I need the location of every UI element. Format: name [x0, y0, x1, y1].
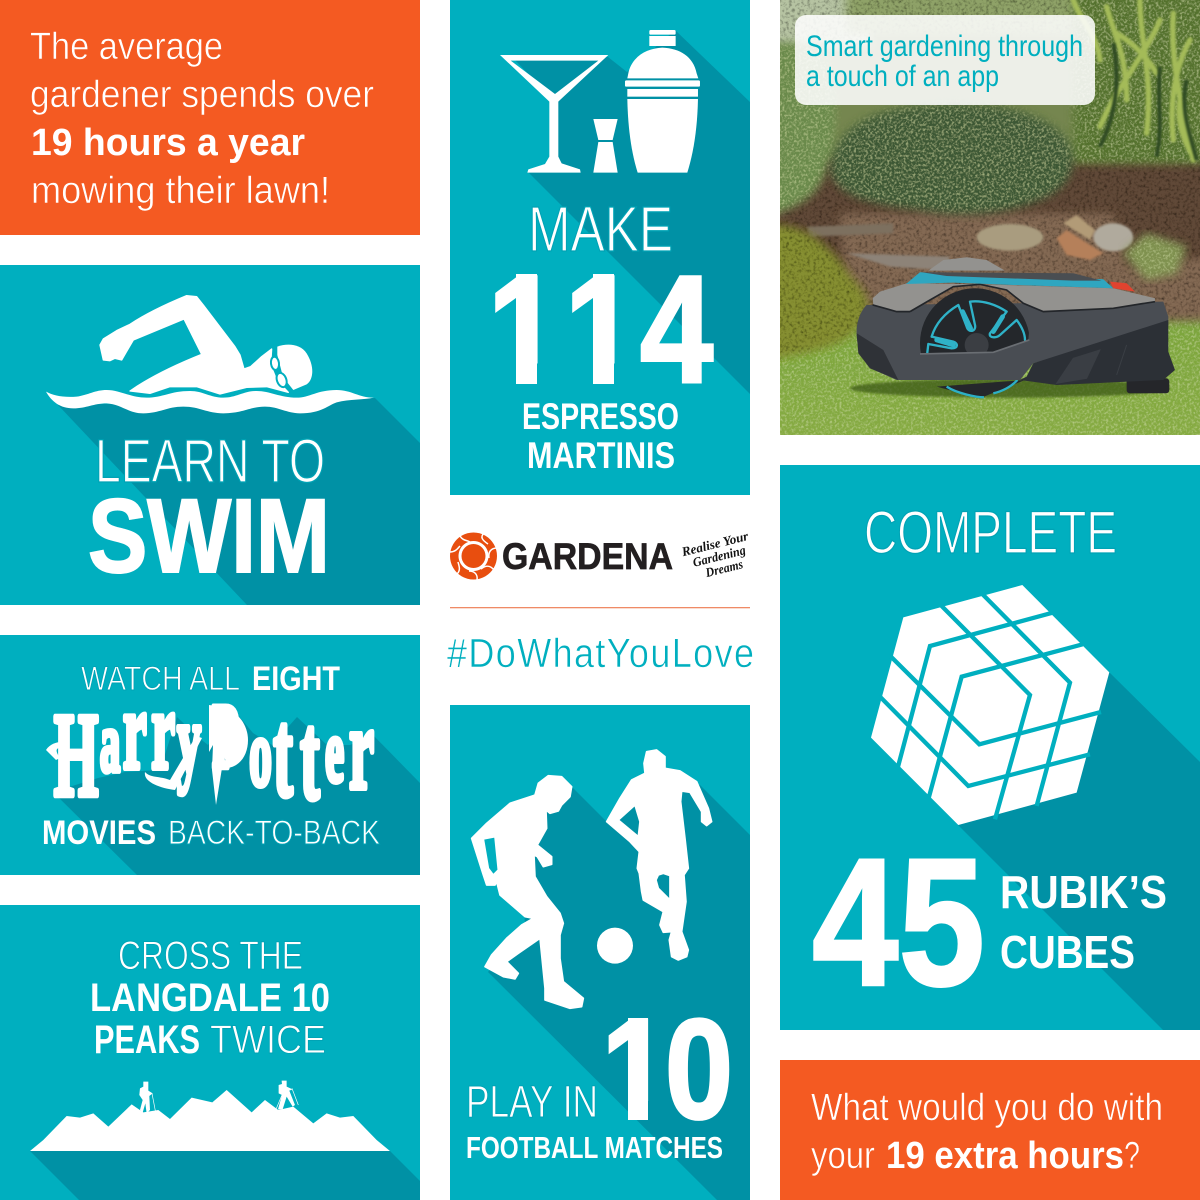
logo: harry potter: r	[123, 670, 147, 793]
left shrub	[767, 226, 868, 360]
logo: harry potter: t	[273, 685, 293, 823]
wordmark: GARDENA	[502, 536, 673, 577]
callout: smart gardening: Smart gardening through	[806, 30, 1083, 63]
text: cross the langdale 10 peaks twice: LANGDALE 10	[90, 976, 330, 1020]
number: 10: 10	[602, 990, 733, 1149]
text: complete: COMPLETE	[864, 499, 1117, 566]
tagline: Gardening	[691, 542, 748, 570]
text: espresso martinis: MARTINIS	[527, 435, 675, 476]
text: watch all eight: EIGHT	[252, 660, 340, 698]
heading: swim: SWIM	[88, 478, 330, 595]
icon: swimmer	[46, 296, 374, 413]
tagline: Dreams	[703, 556, 744, 580]
panel: langdale 10 peaks	[0, 905, 420, 1200]
intro text: 19 hours a year	[31, 122, 305, 164]
logo: harry potter: t	[300, 688, 320, 826]
hashtag: #DoWhatYouLove	[447, 631, 754, 676]
robot mower	[850, 257, 1175, 398]
question text	[811, 1087, 1163, 1177]
number: 114: 114	[488, 245, 713, 415]
text: play in: PLAY IN	[466, 1076, 598, 1127]
logo: harry potter: e	[325, 702, 344, 801]
mulch bed	[767, 160, 1200, 337]
heading: learn to: LEARN TO	[95, 427, 325, 495]
panel: mower photo	[767, 0, 1200, 448]
lawn	[767, 322, 1200, 448]
number: 45: 45	[812, 820, 985, 1024]
logo: harry potter: o	[249, 702, 272, 807]
text: rubik's cubes	[1000, 866, 1167, 978]
callout: smart gardening: a touch of an app	[806, 60, 999, 93]
number: 114	[495, 274, 714, 384]
intro text	[30, 26, 374, 212]
icon: mountains and hikers	[30, 1081, 390, 1151]
panel: orange intro	[0, 0, 420, 235]
text: movies back-to-back	[42, 814, 380, 852]
logo: gardena	[450, 528, 757, 585]
logo: harry potter: r	[151, 670, 175, 793]
tagline	[679, 528, 757, 585]
text: espresso martinis	[522, 396, 679, 476]
logo: harry potter	[46, 670, 374, 826]
text: watch all eight: WATCH ALL	[81, 660, 240, 698]
number: 10	[608, 1017, 730, 1121]
text: make: MAKE	[528, 193, 673, 265]
logo: harry potter: r	[349, 685, 374, 815]
text: cross the langdale 10 peaks twice: TWICE	[210, 1018, 326, 1062]
text: rubik's cubes: CUBES	[1000, 926, 1135, 978]
icon: gardena flower	[450, 532, 497, 580]
logo: harry potter: H	[54, 689, 99, 822]
text: movies back-to-back: MOVIES	[42, 814, 156, 852]
intro text: The average	[30, 26, 223, 68]
icon: cocktail glass, jigger and shaker	[500, 30, 700, 173]
logo: harry potter: P	[212, 685, 239, 787]
text: espresso martinis: ESPRESSO	[522, 396, 679, 437]
panel: learn to swim	[0, 265, 420, 605]
text: cross the langdale 10 peaks twice: CROSS THE	[118, 934, 303, 978]
intro text: gardener spends over	[30, 74, 374, 116]
panel: harry potter	[0, 635, 420, 875]
panel: espresso martinis	[450, 0, 750, 495]
stones	[807, 215, 1133, 270]
intro text: mowing their lawn!	[31, 170, 330, 212]
icon: football players	[472, 750, 712, 1008]
icon: rubik's cube	[871, 585, 1109, 825]
tagline: Realise Your	[679, 528, 751, 559]
panel: football	[450, 705, 750, 1200]
callout: smart gardening	[795, 15, 1095, 105]
question text: ?	[1124, 1135, 1140, 1177]
logo: harry potter: y	[177, 684, 201, 795]
panel: orange question	[780, 1060, 1200, 1200]
text: cross the langdale 10 peaks twice	[90, 934, 330, 1062]
text: cross the langdale 10 peaks twice: PEAKS	[94, 1018, 200, 1062]
text: football matches: FOOTBALL MATCHES	[466, 1130, 723, 1165]
ball	[597, 928, 633, 964]
question text: 19 extra hours	[886, 1135, 1124, 1177]
text: rubik's cubes: RUBIK’S	[1000, 866, 1167, 918]
panel: rubik's cubes	[780, 465, 1200, 1030]
background bushes	[780, 36, 839, 218]
logo: harry potter: a	[100, 697, 120, 790]
text: movies back-to-back: BACK-TO-BACK	[168, 814, 380, 852]
question text: your	[811, 1135, 875, 1177]
